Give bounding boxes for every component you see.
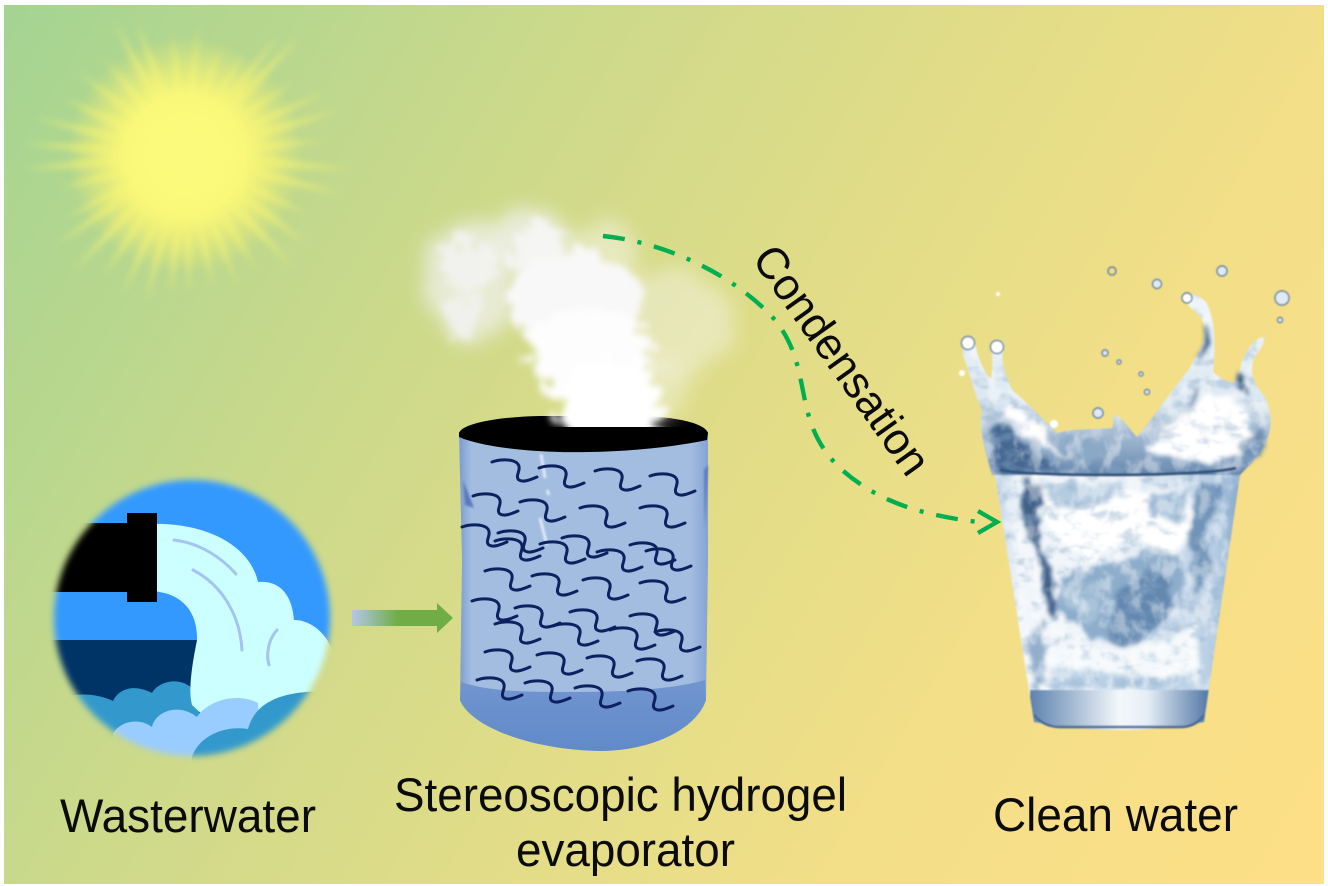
side reflections [463,465,708,530]
stream highlights [174,540,277,665]
glass rim line [1000,468,1236,475]
cylinder body [459,432,708,751]
arrow: condensation path [603,236,997,533]
steam haze [422,210,735,425]
bottom clouds blue [192,692,314,760]
cylinder rim [459,416,708,452]
glass body [995,475,1240,730]
water droplets [959,266,1289,428]
right dark streak [1190,480,1225,600]
splash crown [963,295,1271,475]
water level [460,680,706,751]
glass base [1030,690,1210,730]
dark water band [51,640,200,714]
glass base edge [1034,715,1204,727]
ice bright area [1040,490,1195,560]
splash detail [991,320,1265,472]
label: Stereoscopic hydrogel evaporator: Stereoscopic hydrogel [394,768,847,821]
label: Clean water: Clean water [993,788,1238,841]
water stream [157,524,332,713]
label: Stereoscopic hydrogel evaporator: evaporator [516,823,735,876]
label: Wasterwater: Wasterwater [60,789,316,842]
icon: hydrogel evaporator cylinder [459,416,708,751]
steam core [442,224,666,465]
hydrogel squiggles [462,460,700,710]
icon: sun [25,18,350,302]
arrow: wastewater to evaporator [352,603,453,633]
icon: wastewater pipe in circle [49,475,335,761]
pipe [51,513,157,602]
bottom clouds dark [73,681,200,734]
left dark streak [1022,482,1055,620]
label: Condensation: Condensation [743,235,941,485]
icon: glass of clean water with splash [959,266,1289,730]
bottom clouds light [113,698,258,760]
label: Stereoscopic hydrogel evaporator [394,768,847,876]
water texture [960,290,1280,690]
lower clear water [1045,620,1200,690]
steam cloud [422,210,735,465]
ice cube [1055,550,1185,645]
